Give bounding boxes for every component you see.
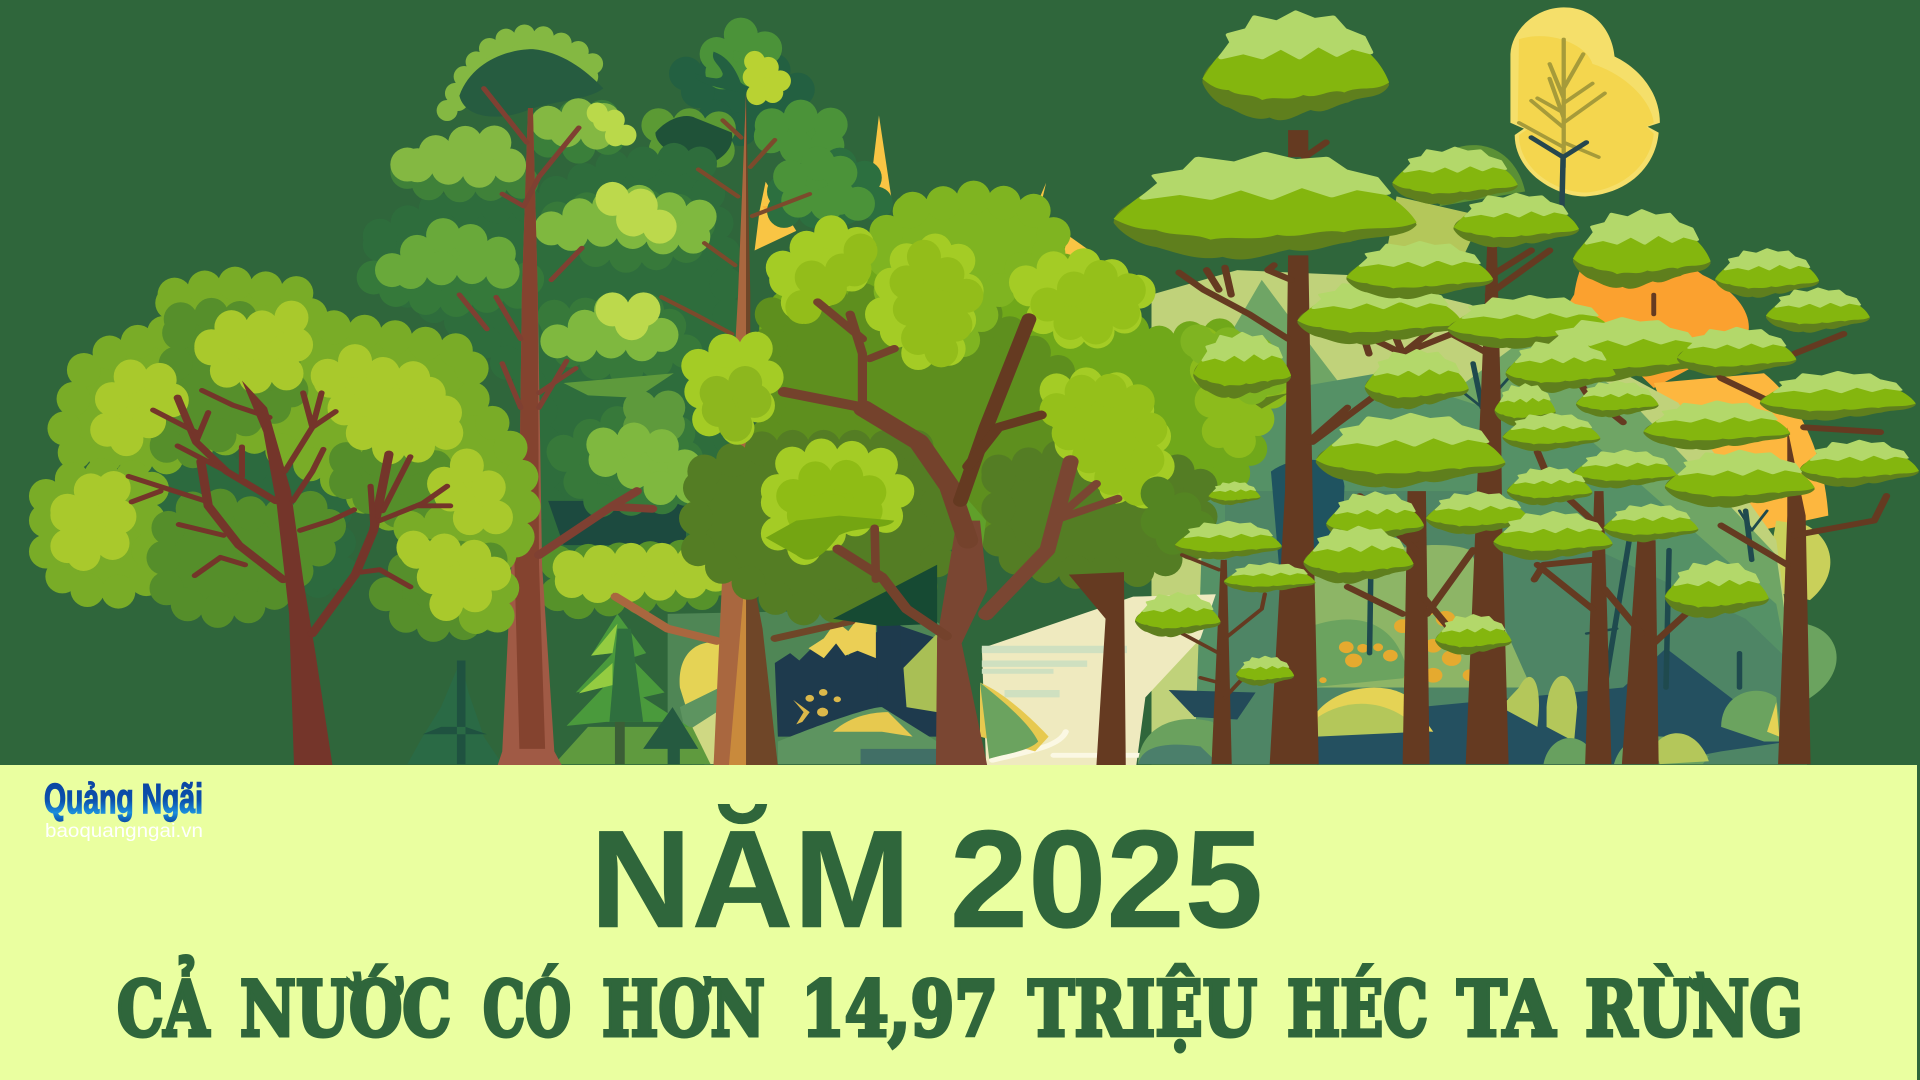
yellow round tree	[1510, 7, 1660, 209]
title: year: NĂM 2025	[590, 802, 1263, 957]
logo: Quảng Ngãi newspaper	[44, 775, 203, 842]
subtitle: 14,97	[801, 964, 998, 1054]
pine branches	[1179, 142, 1886, 697]
bushes and undergrowth	[980, 676, 1782, 764]
central tree mid canopy	[772, 206, 1256, 491]
bright fir	[551, 614, 710, 764]
crowns of second tree	[686, 59, 802, 133]
logo wordmark: Quảng Ngãi	[44, 775, 203, 822]
subtitle	[117, 954, 1803, 1054]
pine trunks	[1212, 130, 1811, 764]
right pine grove	[1114, 12, 1919, 764]
central tree trunk and branches	[784, 302, 1126, 766]
bottom title band	[0, 765, 1917, 1080]
second tree trunk	[616, 93, 851, 766]
subtitle: HÉC	[1287, 964, 1428, 1054]
pine crown tiers	[407, 172, 524, 186]
small background pines	[407, 614, 710, 764]
subtitle: CÓ	[483, 964, 571, 1054]
subtitle: RỪNG	[1585, 964, 1803, 1054]
tall pine trunk and branches	[459, 88, 652, 766]
tree: tall trunk with layered crowns	[374, 34, 876, 766]
forest illustration	[46, 7, 1920, 766]
subtitle: TRIỆU	[1028, 964, 1257, 1054]
dark back foliage of tall pine	[380, 157, 735, 540]
background thin dark trees	[1370, 363, 1767, 688]
lower-centre clearing	[668, 609, 960, 764]
right edge canopy lobes	[1204, 344, 1274, 444]
logo website: baoquangngai.vn	[45, 821, 203, 842]
mountains	[1152, 270, 1807, 764]
top crown	[447, 35, 595, 113]
left tree trunk and branches	[129, 381, 450, 766]
orange tree	[1384, 145, 1837, 700]
subtitle: NƯỚC	[240, 964, 451, 1054]
subtitle: HƠN	[602, 964, 765, 1054]
subtitle: TA	[1457, 964, 1556, 1054]
sun-yellow peaks	[755, 87, 1920, 255]
lime crown clusters	[882, 196, 1063, 344]
tree: front left broadleaf	[46, 282, 527, 766]
distant forest scene	[668, 7, 1920, 766]
pine canopies	[1114, 12, 1919, 686]
dark small pine	[407, 661, 502, 764]
tree: central broadleaf	[695, 196, 1289, 766]
subtitle: CẢ	[117, 954, 210, 1054]
orange flower clusters	[1319, 602, 1477, 683]
river	[982, 594, 1256, 766]
